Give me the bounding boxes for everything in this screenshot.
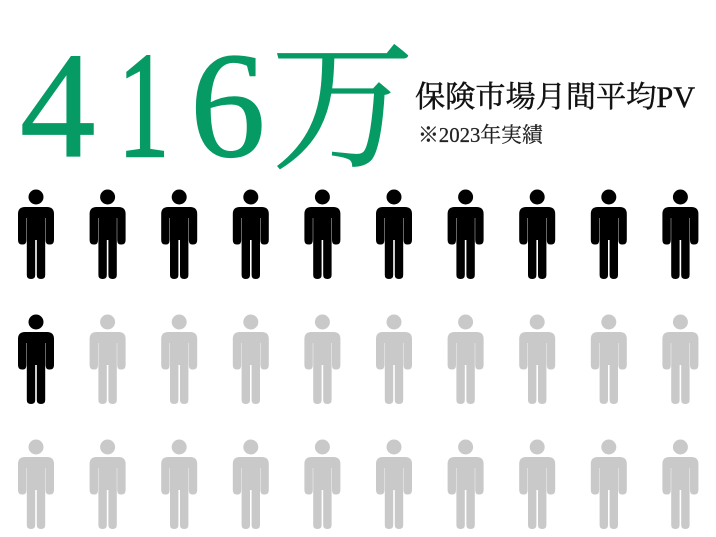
title: 416万: [20, 0, 414, 198]
note: 2023年実績: ※2023年実績: [418, 124, 545, 147]
title: 416万: 1: [118, 22, 169, 189]
title: 416万: 6: [190, 21, 266, 189]
title: 416万: 4: [20, 21, 96, 189]
pictogram row 2: [18, 314, 698, 404]
pictogram row 1: [18, 190, 698, 279]
heading: 保険市場月間平均PV: 保険市場月間平均PV: [415, 81, 695, 114]
pictogram row 3: [18, 440, 698, 529]
